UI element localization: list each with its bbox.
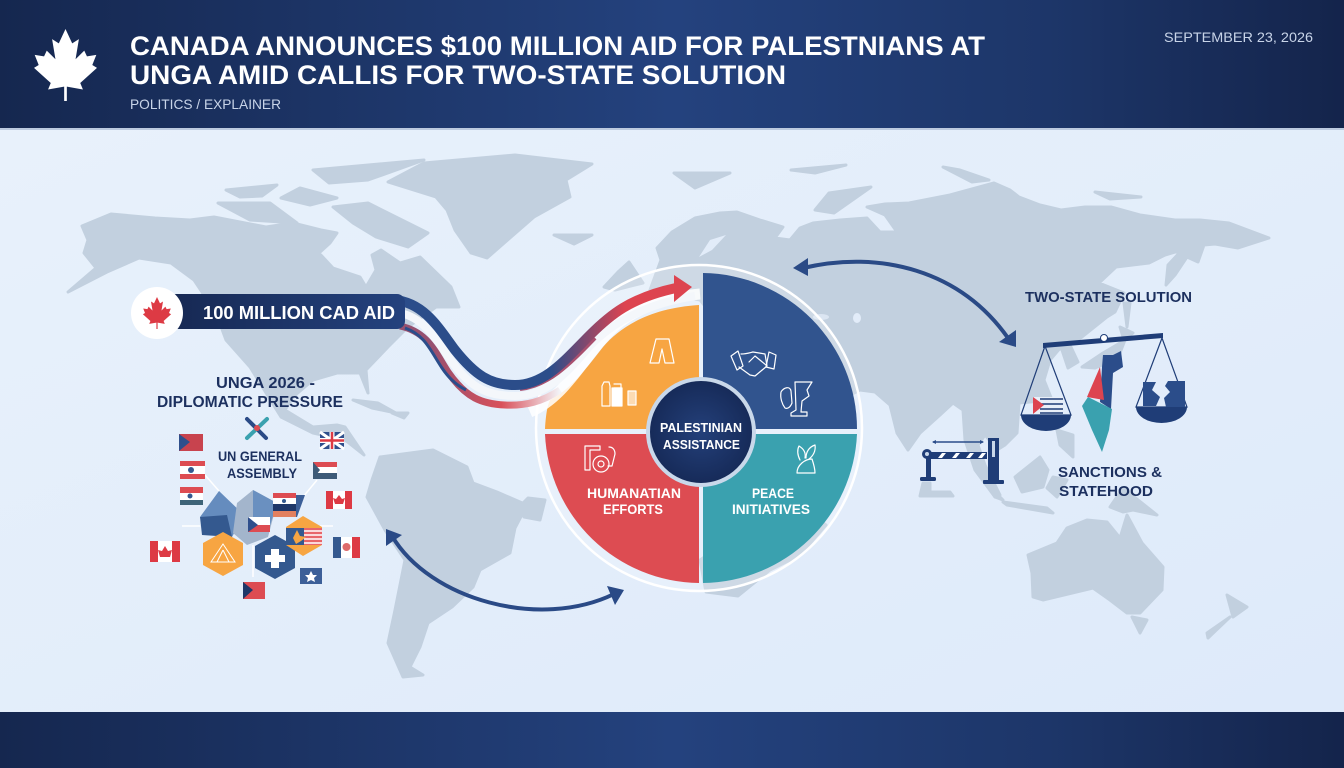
label: peace initiatives: PEACE	[752, 485, 794, 501]
flag: stripes red white teal	[180, 487, 203, 505]
heading: two-state solution: TWO-STATE SOLUTION	[1025, 289, 1192, 306]
flag: center Czech	[248, 517, 270, 532]
icon: handshake	[731, 351, 776, 376]
label: UN General Assembly: ASSEMBLY	[227, 465, 298, 481]
icon: crossed pens	[247, 419, 267, 438]
icon: plant	[797, 445, 815, 473]
flag: blue white red	[333, 537, 360, 558]
hexagon: medical cross	[255, 535, 295, 579]
flag: Canada large	[150, 541, 180, 562]
icon: red maple leaf	[143, 297, 171, 329]
segment: political blue	[703, 273, 857, 429]
arrow: South America to assistance wheel	[386, 529, 624, 609]
heading: UNGA: DIPLOMATIC PRESSURE	[157, 394, 343, 411]
flag: blue star	[300, 568, 322, 584]
map background	[0, 129, 1344, 712]
title: CANADA ANNOUNCES $100 MILLION AID FOR PALESTNIANS AT	[130, 31, 986, 61]
icon: white maple leaf	[34, 29, 97, 101]
title: UNGA AMID CALLIS FOR TWO-STATE SOLUTION	[130, 60, 786, 90]
center hub	[648, 379, 754, 485]
assistance wheel	[536, 265, 862, 591]
flag: bottom	[243, 582, 265, 599]
label: sanctions and statehood: STATEHOOD	[1059, 483, 1153, 500]
header band	[0, 0, 1344, 130]
icon: medical kit	[585, 446, 615, 472]
hexagon: flag	[286, 516, 322, 556]
arrow head	[674, 275, 692, 302]
label: UN General Assembly: UN GENERAL	[218, 448, 302, 464]
date: SEPTEMBER 23, 2026	[1164, 29, 1313, 45]
segment: humanitarian red	[545, 434, 699, 583]
icon: supplies	[602, 382, 636, 406]
category label: POLITICS / EXPLAINER	[130, 96, 281, 112]
heading: UNGA: UNGA 2026 -	[216, 375, 315, 392]
icon: checkpoint barrier	[920, 438, 1004, 484]
banner text: 100 MILLION CAD AID	[203, 303, 395, 323]
aid banner	[131, 287, 405, 339]
label: sanctions and statehood: SANCTIONS &	[1058, 464, 1162, 481]
UN General Assembly cluster	[150, 432, 360, 599]
footer band	[0, 712, 1344, 768]
segment: orange aid	[545, 305, 699, 429]
icon: tent	[650, 339, 674, 363]
flag: center stripes	[273, 493, 296, 517]
flag: top left	[179, 434, 203, 451]
icon: peace figure	[781, 382, 812, 416]
label: peace initiatives: INITIATIVES	[732, 501, 810, 517]
arrow: Europe to two-state solution	[793, 258, 1016, 347]
right pan wall	[1143, 381, 1185, 407]
aid ribbon	[395, 275, 700, 412]
label: humanitarian efforts: HUMANATIAN	[587, 485, 681, 501]
flag: Canada small	[326, 491, 352, 509]
assistance wheel: PALESTINIAN	[660, 420, 742, 435]
flag: red white dark	[313, 462, 337, 479]
icon: balance scale	[1021, 333, 1187, 452]
label: humanitarian efforts: EFFORTS	[603, 501, 663, 517]
flag: stripes red white	[180, 461, 205, 479]
flag: United Kingdom	[320, 432, 344, 449]
hexagon: tent	[203, 532, 243, 576]
map: Palestine	[1082, 351, 1123, 452]
assistance wheel: ASSISTANCE	[663, 437, 740, 452]
left pan flag	[1033, 397, 1063, 414]
segment: peace teal	[703, 434, 857, 583]
